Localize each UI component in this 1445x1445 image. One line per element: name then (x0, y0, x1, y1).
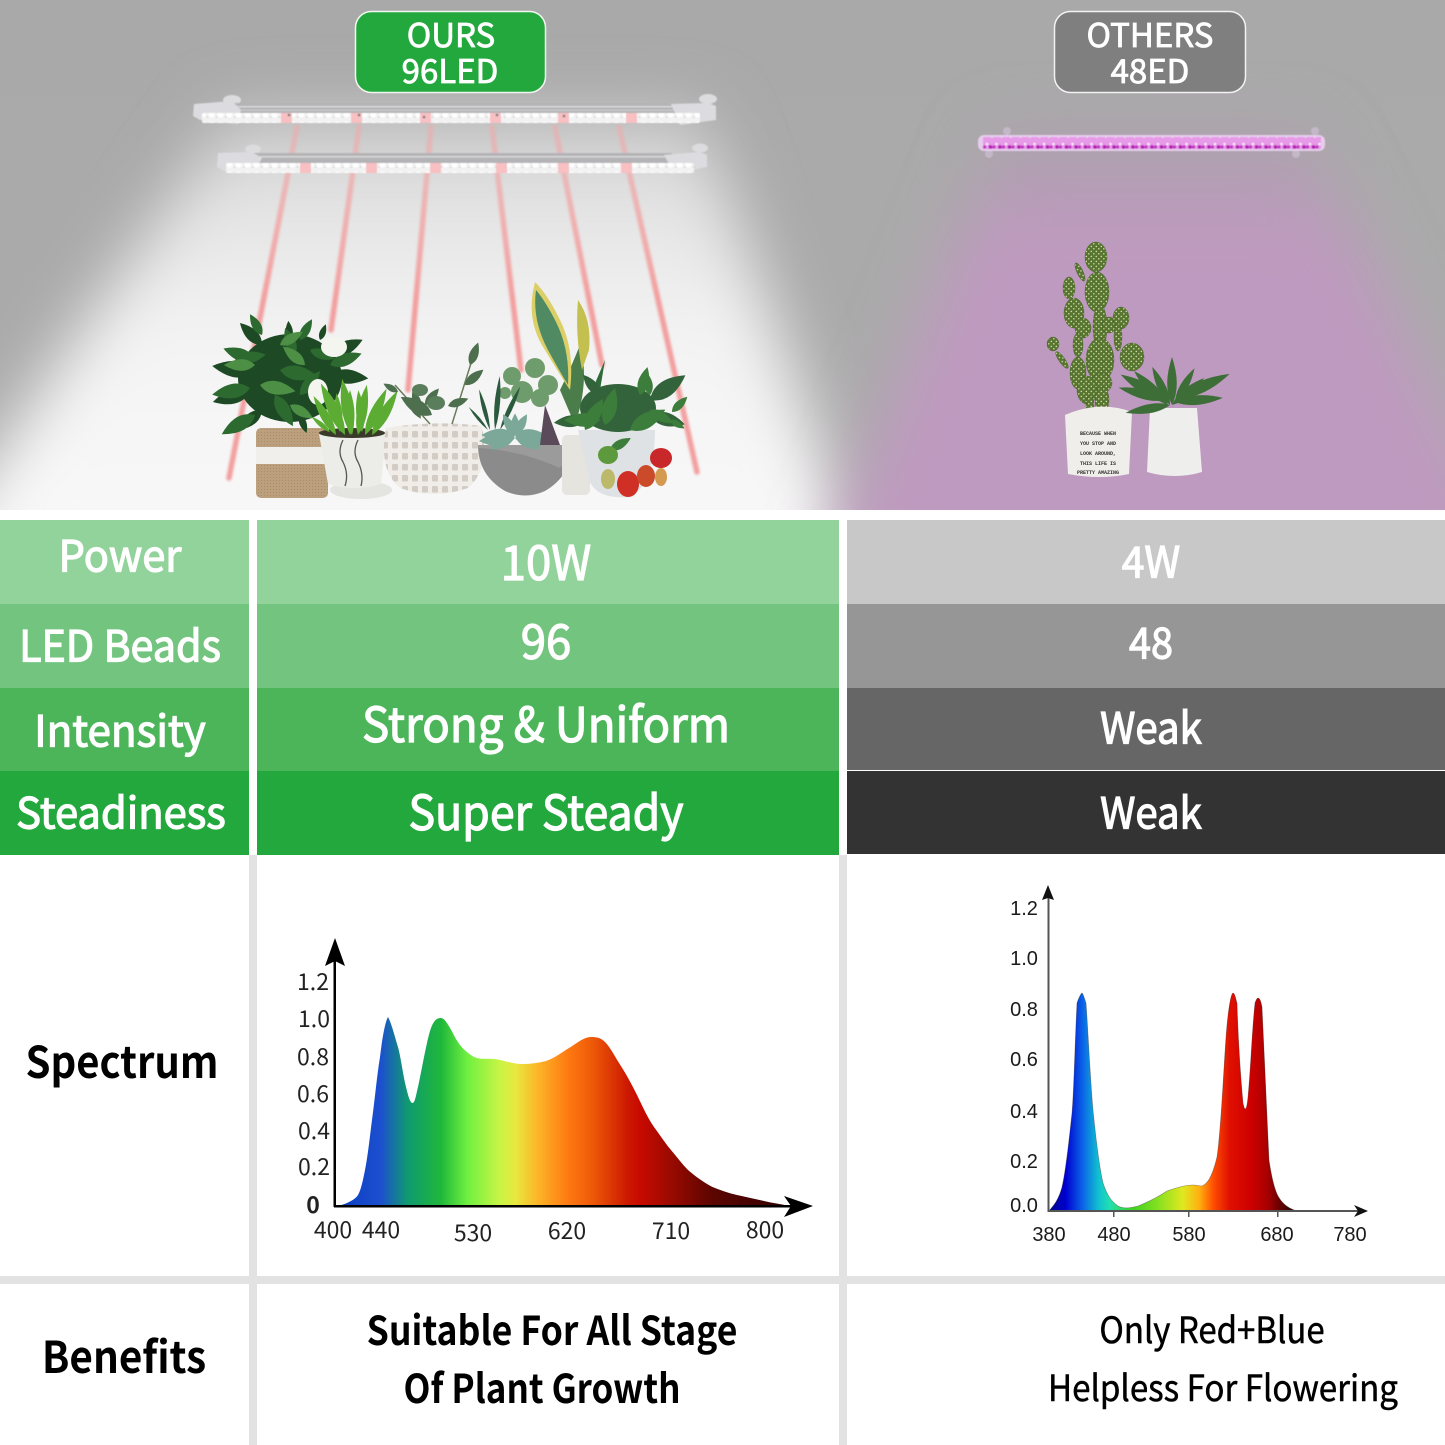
axis labels: ours: 0.6 (297, 1075, 329, 1109)
background (0, 0, 1445, 510)
pot lettering: LOOK AROUND, (1080, 451, 1116, 457)
axis labels: others: 0.6 (1010, 1049, 1038, 1071)
others value: Weak (steadiness): Weak (1100, 780, 1202, 842)
plant: eucalyptus in dimpled pot (382, 341, 486, 494)
axis labels: others: 580 (1172, 1224, 1206, 1246)
axis labels: others (1010, 898, 1367, 1246)
axis labels: others: 0.0 (1010, 1195, 1038, 1217)
axis labels: ours: 710 (652, 1212, 690, 1246)
axis labels: others: 0.8 (1010, 999, 1038, 1021)
red light beams (229, 127, 697, 478)
ours value: Strong & Uniform: Strong & Uniform (362, 686, 730, 756)
badge: others: OTHERS (1087, 9, 1213, 57)
others value: 48 (847, 604, 1445, 688)
others value: Weak (steadiness) (847, 771, 1445, 854)
light cone: ours (white) (0, 112, 865, 580)
text: others benefits: Only Red+Blue (1099, 1302, 1325, 1354)
axis labels: ours: 0.8 (297, 1038, 329, 1072)
row label: LED Beads (0, 604, 249, 688)
row label: LED Beads: LED Beads (19, 612, 221, 674)
row label: Intensity (0, 688, 249, 771)
row label: Power (0, 520, 249, 604)
plant: agave in white pot (1117, 357, 1232, 476)
row label: Intensity: Intensity (34, 698, 206, 760)
axis labels: ours: 0.2 (298, 1148, 330, 1182)
text: ours benefits: Of Plant Growth (404, 1357, 680, 1415)
ours value: 10W: 10W (501, 524, 591, 594)
axis labels: ours: 400 (314, 1211, 352, 1245)
plant: succulents and snake plant in grey bowl (468, 282, 605, 496)
ours value: Super Steady (257, 771, 839, 855)
row label: Power: Power (59, 522, 181, 584)
text: others benefits (1048, 1302, 1398, 1412)
spectrum curve: others (1049, 993, 1297, 1211)
axis labels: others: 480 (1097, 1224, 1131, 1246)
panel: lighting comparison photo (0, 0, 1445, 510)
pot lettering: THIS LIFE IS (1080, 461, 1116, 467)
axis labels: ours: 0 (306, 1186, 320, 1220)
axis labels: ours: 1.2 (297, 963, 329, 997)
others value: 4W (847, 520, 1445, 604)
axis labels: others: 380 (1032, 1224, 1066, 1246)
plant: gardenia in burlap pot (211, 312, 369, 498)
row label: Benefits: Benefits (42, 1322, 206, 1386)
pot lettering (1077, 431, 1119, 476)
text: others benefits: Helpless For Flowering (1048, 1360, 1398, 1412)
row label: Steadiness (0, 771, 249, 855)
axes: others (1042, 885, 1368, 1217)
text: ours benefits: Suitable For All Stage (367, 1299, 737, 1357)
others value: 48: 48 (1129, 610, 1173, 672)
lamp: lower 96LED bar (217, 144, 708, 174)
axis labels: others: 0.4 (1010, 1101, 1038, 1123)
axis labels: ours: 800 (746, 1211, 784, 1245)
plant: strawberry in white pot (553, 366, 690, 497)
spectrum curve: ours (334, 1017, 789, 1206)
pot lettering: PRETTY AMAZING (1077, 470, 1119, 476)
row label: Steadiness: Steadiness (16, 780, 226, 842)
lamp: others 48LED bar (978, 127, 1325, 158)
light cone: others (purple) (820, 135, 1445, 580)
pot lettering: YOU STOP AND (1080, 441, 1116, 447)
axis labels: others: 1.2 (1010, 898, 1038, 920)
plant: grass in white pot (310, 378, 402, 499)
lamp: upper 96LED bar (193, 94, 717, 125)
axis labels: ours: 530 (454, 1214, 492, 1248)
badge: ours (356, 9, 546, 93)
ours value: Strong & Uniform (257, 688, 839, 771)
axis labels: ours: 1.0 (298, 1000, 330, 1034)
badge: others: 48ED (1111, 45, 1189, 93)
ours value: 96 (257, 604, 839, 688)
others value: Weak (intensity) (847, 688, 1445, 770)
axis labels: ours: 440 (362, 1211, 400, 1245)
plant: cactus in fabric pot (1047, 242, 1144, 477)
row label: Spectrum: Spectrum (25, 1027, 219, 1091)
axes: ours (325, 938, 813, 1217)
ours value: 10W (257, 520, 839, 604)
others value: 4W: 4W (1122, 528, 1180, 590)
others value: Weak (intensity): Weak (1100, 694, 1202, 756)
badge: ours: OURS (407, 9, 495, 57)
axis labels: ours (297, 963, 784, 1248)
pot lettering: BECAUSE WHEN (1080, 431, 1116, 437)
axis labels: others: 0.2 (1010, 1151, 1038, 1173)
axis labels: others: 780 (1333, 1224, 1367, 1246)
axis labels: ours: 620 (548, 1212, 586, 1246)
text: ours benefits (367, 1299, 737, 1415)
axis labels: ours: 0.4 (298, 1112, 330, 1146)
badge: ours: 96LED (402, 45, 498, 93)
axis labels: others: 680 (1260, 1224, 1294, 1246)
badge: others (1054, 9, 1246, 93)
axis labels: others: 1.0 (1010, 948, 1038, 970)
ours value: Super Steady: Super Steady (408, 774, 684, 844)
ours value: 96: 96 (521, 603, 571, 673)
